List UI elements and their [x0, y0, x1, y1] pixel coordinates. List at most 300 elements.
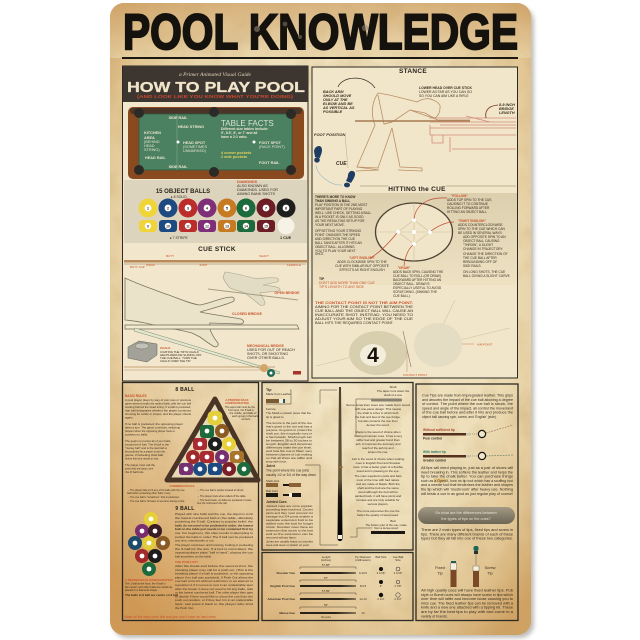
left column: joint: added onto the butt for longer	[266, 522, 313, 526]
pool table diagram: TABLE FACTS	[221, 119, 274, 128]
right column: shaft and woods	[346, 385, 410, 534]
solid balls row: 8	[285, 206, 288, 210]
lower head note	[419, 86, 472, 98]
right column: shaft and woods: serious players.	[367, 502, 389, 506]
left english note: CUE WITH SIMILAR BUT OPPOSITE	[335, 264, 389, 268]
row: english	[270, 576, 402, 588]
follow note: HITTING AN OBJECT BALL	[447, 210, 487, 214]
pool table diagram: HEAD STRING	[178, 125, 204, 129]
tip note: DON'T ADD MORE THAN ONE CUE	[319, 281, 375, 285]
left column: joint: removed without harm.	[266, 536, 297, 540]
9 ball rules text: the Push Out.	[175, 606, 194, 610]
back arm note: AS VERTICAL AS	[322, 106, 355, 110]
diagram: 9 ball rack	[128, 512, 170, 576]
right column: shaft and woods: denser the wood.	[366, 423, 390, 427]
row: masse: 13	[361, 611, 365, 615]
intro text: speed and angle of the impact, all control the movement	[422, 406, 513, 410]
draw note: SCRATCHING. (SINKING THE	[393, 290, 437, 294]
cue stick section: CHALK	[160, 346, 171, 350]
right column: shaft and woods: reach of the ash tip as it	[362, 446, 394, 450]
right column: shaft and woods: the shaft is a flex in which both	[358, 411, 399, 415]
intro text: Cue Tips are made from impregnated leather. This grips	[422, 394, 513, 398]
pool table diagram: HEAD RAIL	[145, 156, 166, 160]
pool table diagram: HEAD SPOT	[183, 141, 206, 145]
left text: IMPORTANT PART OF PLAYING	[315, 207, 363, 211]
right english note: OBJECT BALL CAUSING	[463, 239, 500, 243]
tip wear text: need breaking in. This softens the leather and helps the	[421, 470, 513, 474]
lower head note: SO YOU CAN AIM LIKE A RIFLE	[419, 94, 469, 98]
cue stick section: BUTT	[166, 254, 174, 258]
draw note	[393, 266, 443, 298]
left text: OBJECT BALL, ALLOWING	[315, 245, 355, 249]
pool table diagram: 9', 8.5', 8', or 7' and all	[221, 131, 257, 135]
left column: tip, ferrule, shaft: a hard plastic. Shaft length can	[266, 435, 312, 439]
left text: THERE'S MORE TO KNOW	[315, 195, 355, 199]
left text: BALL TAKES AFTER IT HITS AN	[315, 241, 363, 245]
pool table diagram: SIDE RAIL	[169, 116, 188, 120]
diagram: contact point balls: 4	[367, 344, 379, 367]
right column: shaft and woods: The bottom part of the cue, made	[365, 523, 407, 527]
left column: tip, ferrule, shaft: differences make the cue shaft,	[266, 446, 312, 450]
common fouls: → The cue ball is hit twice or two-time during a shot.	[127, 500, 185, 503]
left column: tip, ferrule, shaft: purpose. Its goal is to protect the	[266, 428, 312, 432]
8 ball rules text: before this time results in loss.	[125, 456, 159, 460]
9 ball rack note: A PROPER RACK CONFIGURATION	[125, 578, 173, 582]
right column: shaft and woods: but also protects the cue from	[358, 419, 398, 423]
solid balls row: 5	[226, 206, 229, 210]
object balls block: ▸ 8 SOLID	[171, 195, 187, 199]
column headers: Ball Size	[376, 555, 387, 559]
common fouls: COMMON FOULS	[170, 484, 194, 488]
panel: 8 ball and 9 ball: 8 BALL	[175, 387, 195, 393]
9 ball rules text: player if no ball was pocketed). A Push Out allows the	[175, 575, 253, 579]
cue stick section: CUE STICK	[198, 246, 236, 253]
8 ball rules text: be pocketed by a player to win the	[125, 450, 165, 454]
illustration: player stance	[355, 93, 470, 171]
8 ball rules text: except the 8 ball. The 8 ball is the	[125, 442, 169, 446]
row: american: 2 1/4"	[377, 597, 385, 601]
left text: YOU TO PLAN YOUR NEXT	[315, 249, 356, 253]
left text: POINT CHANGES THE SPEED	[315, 233, 361, 237]
9 ball rules text: The player continues until missing, fouling or pocketing	[175, 543, 253, 547]
9 ball rules text: balls do not need to be pocketed in order, the lowest	[175, 523, 253, 527]
left text: PLAY POSITION IS THE 2ND MOST	[315, 203, 367, 207]
hitting the cue section: HITTING the CUE	[388, 186, 446, 193]
panel: 8 ball and 9 ball	[122, 382, 259, 620]
back arm note: SHOULD MOVE	[323, 94, 352, 98]
row: american: 12-14	[359, 597, 367, 601]
common fouls: four the multi-touch the rail.	[197, 502, 228, 505]
pool table diagram: AREA	[144, 136, 155, 140]
pool table diagram: SIDE RAIL	[169, 165, 188, 169]
follow note	[447, 194, 492, 214]
8 ball rules text: pockets no balls.	[125, 432, 148, 436]
cue stick section: OPEN BRIDGE	[274, 291, 300, 295]
tip line: Make all the easy ones first and you won't have as hard ones	[124, 615, 216, 619]
solid balls row: 3	[187, 206, 190, 210]
9 ball rules text: pocketing the 9 ball. Contrary to popular belief, the	[175, 520, 253, 524]
solid balls row: 6	[245, 206, 248, 210]
column headers: (inches)	[321, 558, 331, 562]
cue stick section: OVER OTHER BALLS.	[247, 356, 285, 360]
diamonds note	[237, 180, 278, 196]
left column: tip, ferrule, shaft: snap with force.	[266, 460, 287, 464]
bridge length label: LENGTH	[499, 111, 515, 115]
proper rack note: corners.	[241, 417, 251, 421]
pool table diagram: FOOT SPOT	[259, 141, 282, 145]
tip types text	[421, 528, 513, 541]
bridge length label	[486, 103, 515, 118]
right column: shaft and woods: ash. It improves the accuracy and	[356, 442, 401, 446]
follow note: ROLLING FORWARD AFTER	[447, 206, 490, 210]
pool table diagram: HEAD	[144, 144, 155, 148]
striped balls row: 9	[147, 224, 149, 228]
9 ball rules text: after the break. It does not need to hit any balls, rails	[175, 587, 253, 591]
8 ball rules text: The goal is to pocket all of your balls,	[125, 439, 171, 443]
pool table diagram: 2 side pockets	[221, 155, 247, 159]
pool table diagram: have a 2:1 ratio.	[221, 135, 247, 139]
tip wear text: the tip which will 'mushroom' after heavy use. Nothing	[421, 488, 513, 492]
right column: shaft and woods: cues in English Pool and Snooker	[356, 461, 400, 465]
8 ball rules text: pocket they are trying to sink	[125, 466, 153, 470]
illustration: open bridge hand	[208, 272, 298, 305]
right column: shaft and woods: Maple is the wood of choice when	[355, 430, 401, 434]
cue stick section	[124, 246, 307, 377]
row: masse: No joint	[321, 615, 331, 619]
tip wear text: such as a OpenX, how no tip tool which has a scuffing tool	[421, 479, 513, 483]
9 ball rules text: breaking player if a ball is pocketed, or the opposing	[175, 572, 253, 576]
solid balls row: 2	[167, 206, 170, 210]
pool table diagram: FOOT RAIL	[259, 161, 280, 165]
proper rack note: The apex ball must be the	[225, 405, 255, 409]
right column: shaft and woods: better the quality of wood used.	[357, 513, 399, 517]
left english note: EFFECTS AS RIGHT ENGLISH	[339, 268, 385, 272]
proper rack note: the middle, and balls of	[230, 411, 257, 415]
right english note: "THROW", A SLIGHT	[463, 243, 493, 247]
follow note: "FOLLOW"	[451, 194, 468, 198]
9 ball rules text: spot, can pass it back to the player who shot	[175, 602, 253, 606]
left column: joint: separate extension butt to be	[266, 518, 313, 522]
back arm note: ELBOW AND BE	[323, 102, 353, 106]
common fouls: → The best break: no balls are pocketed or leave	[197, 499, 252, 502]
9 ball rules text: cue ball to be hit without restriction, in an attempt to	[175, 579, 253, 583]
striped balls row: 11	[186, 224, 190, 228]
pool table diagram: (SOMETIMES	[183, 145, 208, 149]
left text: AND DIRECTION THE CUE	[315, 237, 355, 241]
9 ball rules text: cue. For beginners, this often results in attempting to	[175, 531, 253, 535]
left column: tip, ferrule, shaft: length. English and American	[266, 442, 312, 446]
diamonds note: DIAMONDS. USED FOR	[237, 188, 278, 192]
connector lines	[266, 390, 372, 545]
right column: shaft and woods: The more expensive the cue the	[357, 509, 400, 513]
metal sign background	[110, 3, 534, 638]
left text: WELL. USE CHECK, GETTING A BALL	[315, 211, 372, 215]
right column: shaft and woods: Some American cues are made from wood	[346, 403, 410, 407]
proper rack note: front spot, the 8 ball in	[228, 408, 254, 412]
back arm note: BACK ARM	[323, 90, 344, 94]
diagram: contact point balls	[316, 300, 510, 377]
left column: tip, ferrule, shaft: tip is glued to	[266, 415, 284, 419]
right english note: CHANGE IN TRAJECTORY.	[463, 247, 504, 251]
8 ball rules text: The player must call the	[125, 463, 155, 467]
common fouls: → The player fouls when called off the table.	[197, 495, 247, 498]
pool table diagram: STRING)	[144, 148, 160, 152]
9 ball rules text: ball on the table just needs to be contacted first by	[175, 527, 253, 531]
draw note: ESPECIALLY USEFUL TO AVOID	[393, 286, 442, 290]
cue stick section: SHOTS, OR SHOOTING	[247, 352, 288, 356]
9 ball rules text: to decide if they would like to shoot the cue from the	[175, 594, 253, 598]
left text: IN A POCKET IS ONLY AS GOOD	[315, 215, 364, 219]
diagram: without sufficient tip: Without sufficient tip	[423, 428, 455, 432]
8 ball rules text: A pool player plays by way of coin toss or previous	[125, 398, 191, 402]
tip types text: There are 2 main types of tips, fixed tips and screw in	[421, 528, 513, 532]
left column: joint: usually 1/2 or 3/4 of the way down	[266, 473, 316, 477]
lower head note: LOWER HEAD OVER CUE STICK	[419, 86, 472, 90]
object balls block	[124, 180, 307, 243]
striped balls row: 12	[205, 224, 209, 228]
closing text: All high quality cues will have fixed leather tips. Pub	[421, 588, 513, 592]
diagram: with leather tip: Greater control	[423, 458, 446, 462]
tip wear text: All tips will need playing in, just as a pair of shoes will	[421, 466, 513, 470]
left text	[315, 195, 372, 256]
pool table diagram: 4 corner pockets	[221, 151, 251, 155]
cue stick section: COATING THE TIP IN CHALK	[160, 350, 199, 354]
pool table diagram	[128, 107, 304, 179]
row: snooker: Snooker Cue	[276, 571, 295, 575]
9 ball rack note: The 1 ball at the front, the 9 ball in	[125, 582, 166, 586]
left column: joint: The point where the cue joins	[266, 468, 309, 472]
follow note: CAUSING IT TO CONTINUE	[447, 202, 488, 206]
right column: shaft and woods: with one-piece design. This means	[355, 407, 402, 411]
pool table diagram: KITCHEN	[144, 131, 161, 135]
contact point note: CUE BALL AND THE OBJECT BALL WILL CAUSE AN	[315, 309, 414, 313]
9 ball rules text: opposing player plays "ball in hand", placing the cue	[175, 551, 253, 555]
illustration: mechanical bridge	[124, 328, 301, 377]
left column: joint: providing less-involved. Center	[266, 508, 313, 512]
9 ball rules text: shooting player may call for a push out. (This is the	[175, 568, 253, 572]
cue stick section: USED FOR OUT OF REACH	[247, 348, 295, 352]
striped balls row: 13	[225, 224, 229, 228]
tip note: TIP'S LENGTH TO ANY SIDE	[319, 285, 365, 289]
panel: 8 ball and 9 ball: 9 BALL	[175, 506, 195, 512]
illustration: closed bridge hand	[125, 278, 299, 347]
right column: shaft and woods: Shaft	[389, 385, 397, 389]
left column: joint	[265, 464, 316, 547]
cue stick section: HELPS REDUCE SLIDING OFF	[160, 353, 202, 357]
left text: SHOT.	[315, 252, 324, 256]
tip types text: tips. There are many different brands of each of these	[421, 532, 513, 536]
left column: tip, ferrule, shaft: Ferrule	[266, 407, 276, 411]
contact point note: BALL HITS THE REQUIRED CONTACT POINT.	[315, 321, 394, 325]
closing text: knife and a new one attached with a tipping kit. These	[421, 606, 513, 610]
closing text: miss cue. The fixed leather tips can be removed with a	[421, 601, 513, 605]
right column: shaft and woods: The cues supplied in pubs and bars	[354, 474, 402, 478]
left text: THAN SINKING A BALL	[315, 199, 350, 203]
proper rack note: each group in the back	[232, 414, 259, 418]
column headers: Size	[395, 558, 401, 562]
diamonds note: AIMING BANK SHOTS	[237, 192, 275, 196]
left column: tip, ferrule, shaft: be between 28 to 30 inches in	[266, 438, 312, 442]
column headers	[321, 555, 404, 562]
illustration: vertical cue	[338, 387, 342, 541]
left english note: "LEFT ENGLISH"	[349, 256, 376, 260]
right column: shaft and woods: Butt	[390, 519, 396, 523]
proper rack note: A PROPER RACK	[225, 398, 249, 402]
striped balls row: 14	[244, 224, 248, 228]
panel: stance: CUE	[336, 161, 347, 167]
left column: joint: end so the extension can be	[266, 532, 313, 536]
hitting the cue section	[313, 185, 517, 298]
right english note: ADD OPPOSITE SPIN TO AN	[463, 235, 506, 239]
draw note: CUE BALL TO ROLL (OR DRAW)	[393, 274, 441, 278]
callout: types of tips	[418, 507, 515, 524]
left column: tip, ferrule, shaft: and how the cue is fitted, vary	[266, 449, 313, 453]
diagram: contact point balls: AIM POINT	[477, 342, 493, 346]
panel: stance: STANCE	[399, 68, 427, 75]
intro text: and absorbs the impact of the cue ball allowing a degree	[422, 398, 513, 402]
left column: joint: Joint	[266, 464, 276, 468]
right column: shaft and woods: making American cues. It has a very	[354, 434, 403, 438]
row: english: 2"	[380, 584, 382, 588]
contact point note: THE CONTACT POINT IS NOT THE AIM POINT.	[315, 301, 413, 305]
left column: tip, ferrule, shaft: so that all shots are stiffer and	[266, 456, 312, 460]
right english note: ON LONG SHOTS, THE CUE	[463, 270, 505, 274]
9 ball rules text: or the lowest numbered ball. The other player then gets	[175, 591, 253, 595]
right column: shaft and woods: from a dense wood	[374, 526, 398, 530]
heading banner: HOW TO PLAY POOL	[127, 79, 305, 96]
right english note: BALL GIVING A SLIGHT CURVE	[463, 274, 510, 278]
8 ball rules text: takes a turn. The game continues, switching	[125, 426, 180, 430]
bridge length label: 8-9 INCH	[499, 103, 515, 107]
right column: shaft and woods: cues. It has a better grain of a flexible	[353, 465, 403, 469]
8 ball rules text: BASIC RULES	[125, 394, 147, 398]
follow note: ADDS TOP SPIN TO THE CUE,	[447, 198, 492, 202]
diagram: contact point balls: CONTACT POINT	[403, 373, 427, 377]
9 ball rules text: Played with nine balls and the cue, the object is to hit	[175, 512, 253, 516]
row: english: 57"	[324, 576, 328, 580]
diagram: fixed tip	[435, 561, 456, 587]
8 ball rules text	[125, 394, 191, 474]
left column: joint: storage but 3/4 joints enable a	[266, 514, 313, 518]
row: american	[267, 589, 402, 601]
8 ball rules text: that ball designates whether the player continues	[125, 408, 191, 412]
common fouls	[127, 484, 252, 505]
9 ball rules text: the lowest numbered ball on the table, ultimately	[175, 516, 254, 520]
right english note	[458, 219, 510, 278]
diagram: 8 ball rack	[167, 399, 258, 480]
9 ball rack note	[125, 578, 178, 597]
9 ball rules text: reposition it if it comes to rest in an undesirable spot	[175, 583, 253, 587]
cue stick section: THE CUE BALL. TURN THE	[160, 356, 197, 360]
row: masse: Masse Cue	[279, 611, 295, 615]
tip wear text: will break a cue in as good as just regular play of course!	[421, 492, 513, 496]
pool table diagram: Different size tables include:	[221, 127, 268, 131]
diagram: with leather tip	[423, 450, 513, 462]
diagram: cue ball strike points	[370, 198, 454, 266]
cue stick section: SHAFT	[259, 254, 269, 258]
row: masse: 54"	[324, 603, 328, 607]
left column: tip, ferrule, shaft: The Metal or plastic piece that the	[266, 411, 311, 415]
column headers: Length	[322, 555, 331, 559]
9 ball rules text: push out position, or if they feel it is in an undesirable	[175, 598, 253, 602]
cue stick section: JOINT	[199, 263, 208, 267]
9 ball rules text: pocket the balls in order. The 9 ball can be pocketed	[175, 535, 253, 539]
tip wear text: and a needle tool that tenderises the leather and shapes	[421, 483, 513, 487]
arrow: back arm	[338, 78, 375, 88]
row: english: 8-9.5	[360, 584, 367, 588]
row: english: English Pool Cue	[270, 584, 295, 588]
striped balls row: 10	[166, 224, 170, 228]
draw note: CUE BALL.)	[393, 294, 410, 298]
diagram: without sufficient tip	[423, 425, 513, 440]
right column: shaft and woods: and are made of Maple. Both the	[356, 482, 400, 486]
9 ball rack note: placed in a diamond shape.	[125, 588, 158, 592]
left column: joint: shots. Snooker cues have an	[266, 525, 313, 529]
left column: joint: cues and steel or plastic on pool.	[266, 543, 310, 547]
intro text	[422, 394, 513, 419]
right english note: ADDS COUNTERCLOCKWISE	[458, 223, 503, 227]
draw note: BACKWARD AFTER HITTING AN	[393, 278, 442, 282]
right column: shaft and woods: stiffer feel and greater bond than	[356, 438, 400, 442]
left column: tip, ferrule, shaft: shaft cue, this is typically ivory or	[266, 432, 312, 436]
tip wear text: tip to take the chalk better. You can purchase things	[421, 475, 513, 479]
contact point note: AIMING FOR THE CONTACT POINT BETWEEN THE	[315, 305, 414, 309]
right english note: SPIN TO THE CUE WHICH CAN	[458, 227, 505, 231]
left text: AS THE RESULTING SETUP FOR	[315, 219, 365, 223]
common fouls: → The cue ball is pocket instead of struck.	[197, 489, 244, 492]
row: american: 57-59"	[322, 589, 330, 593]
left column: joint: Butt Joint	[266, 489, 278, 493]
left english note	[335, 256, 389, 272]
row: american: 2 1/4"	[394, 597, 402, 601]
right column: shaft and woods: the butt and feet of the cue bridge,	[355, 415, 401, 419]
heading banner: (AND LOOK LIKE YOU KNOW WHAT YOU'RE DOING)	[137, 94, 294, 99]
left column: joint: Shaft Joint	[266, 479, 279, 483]
9 ball rules text: the 9 ball for the win. If a foul is committed, the	[175, 547, 253, 551]
diamonds note: ALSO KNOWN AS	[237, 184, 268, 188]
8 ball rules text: "money ball" and is the last ball to	[125, 446, 167, 450]
8 ball rules text: game winner breaks the racked balls, with the cue ball	[125, 402, 191, 406]
contact point note	[315, 301, 414, 325]
common fouls: → The cue ball is "scratched," that is pocketed.	[127, 496, 179, 499]
solid balls row: 4	[206, 206, 209, 210]
8 ball rules text: shooting for solids or stripes, and the player shoots	[125, 412, 191, 416]
cue stick section: FERRULE	[287, 263, 301, 267]
cue stick section: WRAP	[146, 263, 155, 267]
diamonds note: DIAMONDS	[237, 180, 258, 184]
diagram: screw tip	[473, 546, 496, 587]
row: snooker: 2 1/16"	[394, 571, 402, 575]
left column: tip, ferrule, shaft: between classes of cue making	[266, 452, 312, 456]
pool table diagram: (RACK POINT)	[259, 145, 285, 149]
panel: cue anatomy	[262, 382, 413, 550]
closing text: are by far the best tips to play with and come in a	[421, 610, 513, 614]
right column: shaft and woods: painted back. It will have joints and	[355, 494, 402, 498]
right column: shaft and woods: most of the time with bad nature	[357, 478, 400, 482]
common fouls: ball before contacting other balls, if any.	[127, 492, 171, 495]
draw note: "DRAW"	[398, 266, 411, 270]
8 ball rules text: the 8 ball into.	[125, 470, 144, 474]
solid balls row	[138, 198, 296, 218]
solid balls row: 7	[265, 206, 268, 210]
9 ball rules text: After the break and before the second shot, the	[175, 564, 253, 568]
left column: tip, ferrule, shaft: The ferrule is the part of the cue	[266, 421, 312, 425]
pool table diagram: UNMARKED)	[183, 149, 207, 153]
title: POOL KNOWLEDGE	[123, 4, 518, 60]
intro text: of control. The point where the cue ball is struck, the	[422, 402, 513, 406]
panel: stance: FOOT POSITION	[314, 132, 345, 137]
row: snooker	[276, 563, 402, 575]
